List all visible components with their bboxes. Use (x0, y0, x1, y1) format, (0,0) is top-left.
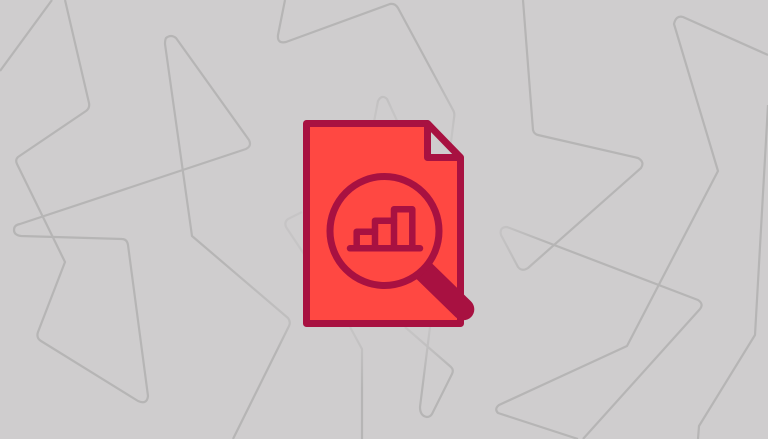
document page (306, 124, 460, 324)
icon: report document with magnifier (306, 124, 463, 324)
soft glow behind the icon (200, 50, 568, 400)
magnifier lens (330, 176, 439, 286)
bar chart inside lens (350, 209, 420, 248)
folded corner (428, 124, 460, 158)
magnifier handle (423, 270, 463, 309)
